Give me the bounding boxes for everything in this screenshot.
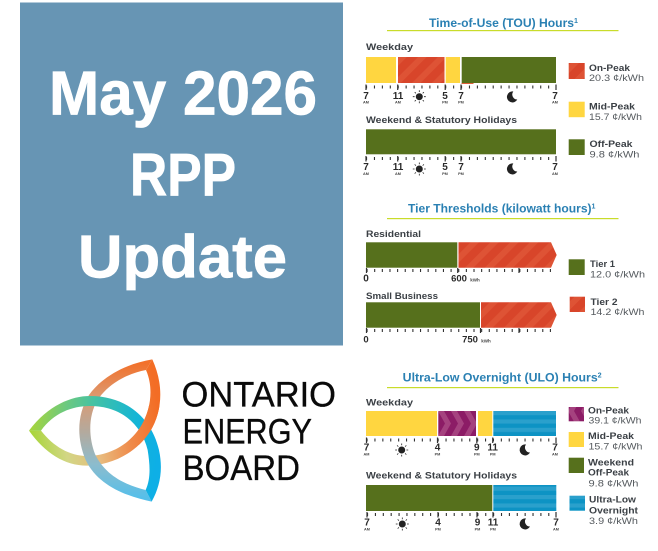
axis: TOU weekday time scale: PM (442, 100, 448, 104)
panel: Time-of-Use hours (363, 16, 645, 532)
axis: residential kWh scale: 600 (451, 274, 467, 285)
legend: ULO rates: 9.8 ¢/kWh (588, 478, 638, 489)
icon: moon (507, 91, 517, 102)
axis: ULO weekday time scale: AM (364, 452, 369, 456)
axis: residential kWh scale: 0 (363, 274, 369, 285)
axis: TOU weekday time scale: AM (552, 100, 558, 104)
axis: TOU weekday time scale: 7 (458, 91, 464, 102)
icon: moon (507, 163, 517, 174)
text: BOARD: BOARD (182, 449, 300, 488)
heading: RPP: RPP (130, 142, 236, 209)
axis: ULO weekend time scale: 4 (435, 518, 441, 529)
text: ONTARIO: ONTARIO (182, 376, 336, 415)
legend: TOU rates: Off-Peak (590, 139, 633, 150)
axis: TOU weekend time scale: 7 (363, 162, 369, 173)
axis: TOU weekday time scale: 5 (442, 91, 448, 102)
axis: ULO weekend time scale: PM (435, 528, 441, 532)
icon: sun (395, 444, 408, 456)
legend: tier rates: Tier 2 (590, 297, 618, 308)
panel: Tier thresholds (363, 202, 618, 345)
axis: TOU weekend time scale: 7 (458, 162, 464, 173)
axis: ULO weekday time scale (364, 438, 558, 456)
chart: ULO weekend bar (366, 485, 556, 511)
legend: ULO rates: Mid-Peak (588, 431, 635, 442)
legend: ULO rates: 39.1 ¢/kWh (588, 416, 642, 426)
legend: TOU rates: 9.8 ¢/kWh (590, 150, 640, 160)
legend: ULO rates: On-Peak (588, 405, 630, 416)
legend: TOU rates: 20.3 ¢/kWh (589, 73, 644, 84)
heading: May 2026: May 2026 (49, 60, 317, 129)
axis: TOU weekday time scale: PM (458, 100, 464, 104)
axis: TOU weekday time scale: AM (395, 100, 401, 104)
legend: TOU rates: On-Peak (589, 63, 631, 74)
panel: Ultra-Low Overnight hours (364, 371, 618, 532)
axis: ULO weekday time scale: AM (552, 452, 558, 456)
heading: Update: Update (78, 223, 287, 290)
legend: ULO rates: Weekend (588, 457, 634, 468)
axis: TOU weekend time scale: 7 (552, 162, 558, 173)
axis: TOU weekday time scale (363, 84, 558, 104)
axis: ULO weekend time scale: 9 (475, 518, 481, 529)
logo: Ontario Energy Board (29, 359, 336, 502)
axis: TOU weekday time scale: 11 (393, 91, 404, 102)
icon: sun (413, 162, 426, 176)
axis: TOU weekday time scale: 7 (552, 91, 558, 102)
legend: tier rates (569, 259, 645, 318)
label: ULO weekend: Weekend & Statutory Holidays (366, 470, 517, 481)
axis: ULO weekday time scale: 9 (474, 442, 480, 454)
heading: tiers: Tier Thresholds (kilowatt hours) (408, 202, 590, 216)
icon: moon (520, 518, 530, 529)
legend: ULO rates: 15.7 ¢/kWh (588, 442, 642, 452)
label: ULO weekday: Weekday (366, 397, 414, 408)
chart: residential bar (366, 242, 557, 268)
heading: tiers: 1 (592, 204, 596, 211)
heading: ULO: Ultra-Low Overnight (ULO) Hours (403, 371, 593, 385)
text: ENERGY: ENERGY (182, 412, 312, 451)
axis: ULO weekday time scale: PM (474, 452, 480, 456)
axis: small business kWh scale: 0 (363, 334, 369, 345)
chart: TOU weekday bar (366, 57, 556, 84)
legend: ULO rates: 3.9 ¢/kWh (589, 516, 638, 527)
axis: TOU weekend time scale (363, 156, 558, 176)
axis: TOU weekend time scale: PM (442, 172, 448, 176)
label: Residential: Residential (366, 229, 421, 240)
legend: TOU rates (569, 63, 644, 160)
axis: small business kWh scale: 750 (462, 334, 478, 345)
label: TOU weekend: Weekend & Statutory Holidays (366, 115, 517, 126)
axis: TOU weekend time scale: 11 (393, 162, 404, 173)
legend: tier rates: 12.0 ¢/kWh (590, 269, 645, 280)
axis: small business kWh scale: kWh (481, 338, 491, 343)
legend: tier rates: Tier 1 (590, 259, 616, 270)
axis: ULO weekend time scale: AM (364, 528, 370, 532)
axis: small business kWh scale (363, 328, 551, 345)
panel: title banner (20, 2, 343, 346)
axis: ULO weekend time scale: 11 (488, 518, 499, 529)
axis: TOU weekend time scale: AM (552, 172, 558, 176)
axis: TOU weekend time scale: AM (395, 172, 401, 176)
icon: sun (396, 518, 409, 530)
axis: TOU weekend time scale: 5 (442, 162, 448, 173)
legend: TOU rates: Mid-Peak (589, 102, 636, 112)
axis: ULO weekday time scale: 7 (552, 442, 558, 454)
legend: tier rates: 14.2 ¢/kWh (590, 307, 644, 318)
legend: ULO rates (569, 405, 642, 527)
axis: residential kWh scale: kWh (470, 278, 480, 283)
label: TOU weekday: Weekday (366, 42, 414, 53)
legend: ULO rates: Overnight (589, 505, 639, 516)
axis: TOU weekday time scale: AM (363, 100, 369, 104)
icon: moon (520, 444, 530, 455)
axis: ULO weekend time scale: 7 (364, 518, 370, 529)
axis: ULO weekend time scale (364, 512, 559, 532)
axis: ULO weekday time scale: 11 (487, 442, 498, 454)
axis: TOU weekend time scale: AM (363, 172, 369, 176)
axis: ULO weekend time scale: PM (490, 528, 496, 532)
axis: ULO weekend time scale: PM (475, 528, 480, 532)
heading: ULO: 2 (598, 373, 602, 380)
chart: small business bar (366, 302, 557, 328)
legend: ULO rates: Ultra-Low (589, 495, 637, 506)
icon: sun (413, 90, 426, 103)
heading: TOU: Time-of-Use (TOU) Hours (429, 16, 573, 30)
chart: TOU weekend bar (366, 129, 556, 154)
icon: trefoil mark (29, 359, 161, 502)
axis: ULO weekend time scale: 7 (553, 518, 559, 529)
heading: TOU: 1 (574, 18, 578, 25)
axis: residential kWh scale (363, 268, 551, 285)
axis: ULO weekday time scale: PM (435, 452, 440, 456)
legend: ULO rates: Off-Peak (588, 468, 630, 479)
axis: ULO weekday time scale: 4 (435, 442, 441, 454)
axis: TOU weekday time scale: 7 (363, 91, 369, 102)
legend: TOU rates: 15.7 ¢/kWh (589, 112, 642, 123)
axis: ULO weekend time scale: AM (553, 528, 559, 532)
axis: ULO weekday time scale: PM (490, 452, 496, 456)
chart: ULO weekday bar (366, 411, 556, 436)
axis: TOU weekend time scale: PM (458, 172, 464, 176)
label: Small Business: Small Business (366, 291, 438, 302)
axis: ULO weekday time scale: 7 (364, 442, 370, 454)
